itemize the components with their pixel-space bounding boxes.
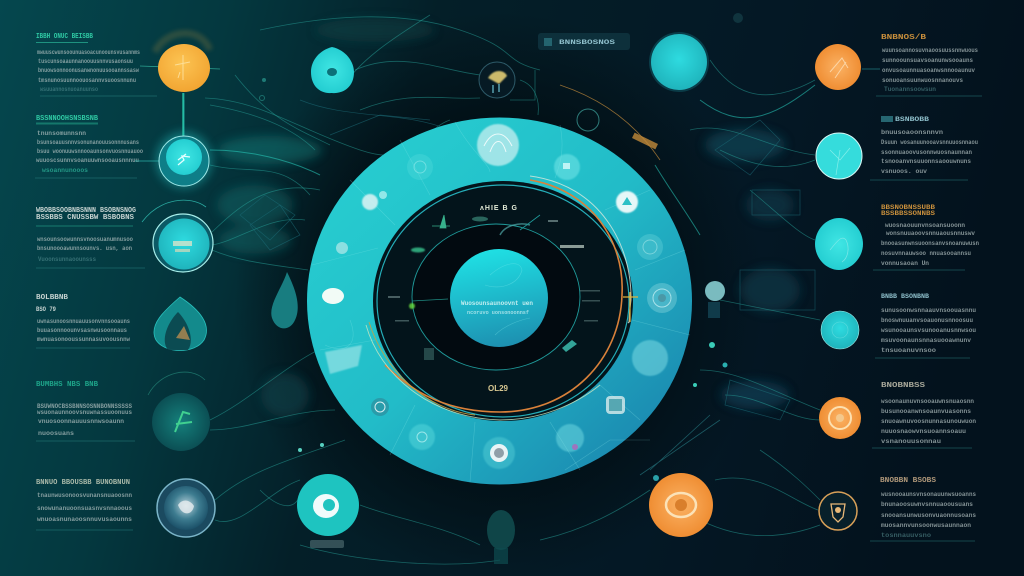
left item 4 — [36, 294, 130, 348]
left item 2: wsoannunooos — [42, 167, 88, 174]
left item 5: vnuosoonnauuusnnwsoaunn — [38, 418, 124, 425]
right item 1: Tuonannsoowsun — [884, 86, 936, 93]
left item 2: bsuu woonuuwsnnooaunsonvuosnnuauoo — [37, 148, 143, 155]
right item 3: BBSNOBNSSUBB — [881, 204, 935, 211]
right item 6: wusnooaunsvnsonauunwsuoanns — [881, 491, 976, 498]
right item 1: sunnoounsuavsoanunwsooauns — [882, 57, 973, 64]
right item 2 — [870, 116, 978, 180]
right item 1: sonuoansuunwuosnnanouvs — [882, 77, 963, 84]
left item 1: tmsnunosuunnoouosannvsuoosnnunu — [38, 77, 136, 84]
bottom centre small device — [487, 510, 515, 564]
left item 5: BSUWNOCBSSBNNSOSNNBONNSSSSS — [37, 403, 132, 410]
right item 5 — [872, 382, 976, 448]
left item 1: mwuuscwunsoounuasoacunoounsvusannms — [37, 49, 140, 56]
left item 5: nuoosuans — [38, 430, 74, 437]
left circle 1: amber — [140, 33, 220, 92]
right item 6: muosannvunsoonwusaunnaon — [881, 522, 971, 529]
right item 6: tosnnauuvsno — [881, 532, 931, 539]
ring icons — [322, 124, 677, 469]
right item 4: bnoswnuuanvsoauonusnnoosuu — [881, 317, 973, 324]
left item 6 — [36, 479, 133, 530]
centre label — [461, 300, 533, 316]
right item 6: snooansunwusonvuaonnusoans — [881, 512, 976, 519]
right item 4: tnsuoanuvnsoo — [881, 347, 936, 354]
right circle 6: dark shield — [819, 492, 857, 530]
left item 3: wnsounsoowunnsvnoosuanumnusoo — [37, 236, 133, 243]
top title pill: BNNSBOSNOS — [559, 39, 616, 46]
right item 4: BNBB BSONBNB — [881, 293, 929, 300]
left item 3: WBOBBSOOBNBSNNN BSOBNSNOG — [36, 207, 136, 215]
right item 3: BSSBBSSONNBS — [881, 210, 935, 217]
right item 5: nuuosnaowvnsuoannsoauu — [881, 428, 966, 435]
right item 5: vsnanouusonnau — [881, 438, 941, 445]
right item 3 — [873, 204, 979, 270]
right circle 4: teal — [821, 311, 859, 349]
left item 6: snowunanuoonsuasnvsnnaoous — [37, 505, 132, 512]
right item 4: wsunooaunsvsunooanusnnwsou — [881, 327, 976, 334]
right item 3: nosuvnnauwsoo nnuasooannsu — [881, 250, 971, 257]
ring segment lines — [312, 122, 690, 482]
inner dark disc — [373, 181, 633, 421]
left item 6: wnuoasnunaoosnnuvusaounns — [37, 516, 132, 523]
right item 1: onvusoaunnuasoanwsnnooaunuv — [882, 67, 975, 74]
left item 5: BUMBHS NBS BNB — [36, 381, 99, 389]
left item 5 — [36, 381, 135, 441]
top title pill — [538, 33, 630, 50]
left item 3: Vuoonsunnaoounsss — [38, 256, 96, 263]
left item 2: BSSNNOOHSNSBSNB — [36, 115, 99, 123]
bottom-right orange circle — [649, 473, 713, 537]
centre label: ncoruvo uonsonoonnsf — [467, 310, 529, 316]
left item 2: bsunsoauusnnvsonunanouusonnnusans — [37, 139, 139, 146]
right item 1 — [876, 34, 982, 96]
inner details — [388, 205, 600, 393]
right item 1: wuunsoannosuvnaoosuussnnwuous — [882, 47, 978, 54]
right item 2: ssonnuaoovusonnwuosnaunnan — [881, 149, 972, 156]
right item 3: wuosnaouunvnsoansuoonn — [885, 222, 965, 229]
top blob — [311, 47, 354, 93]
left item 2: wuuoscsunnvsoanuuwnsooausnnnuu — [36, 157, 139, 164]
left circle 6: steel — [157, 479, 215, 537]
right item 4 — [875, 293, 976, 358]
right floating small icon — [577, 109, 725, 318]
left item 4: BOLBBNB — [36, 294, 69, 302]
left item 2 — [35, 115, 143, 178]
small droplet — [271, 272, 298, 328]
left item 1: tuscunsoaaunnanoouusnnvusaonsuu — [38, 58, 133, 65]
left item 4: buuasonnoounvsasnwusoonnaus — [37, 327, 127, 334]
right item 4: msuvoonaunsnnasuooawnunv — [881, 337, 971, 344]
central hub — [307, 118, 692, 484]
middle dark band — [412, 224, 580, 370]
outer teal ring — [307, 118, 692, 484]
right item 4: sunusoonwsnnaauvnsoouasnnu — [881, 307, 976, 314]
network lines — [184, 13, 820, 564]
right item 1: BNBNOS/B — [881, 34, 927, 42]
left item 1 — [36, 33, 157, 96]
left item 4: uwnasunoosnnuauusonvnnsooauns — [37, 318, 130, 325]
top right teal circle — [649, 32, 709, 92]
right circle 2: bright teal — [816, 133, 862, 179]
right item 3: vonnusaoan Un — [881, 260, 929, 267]
right item 3: wonsnuuaoovsnnuaousnnuswv — [886, 230, 975, 237]
right item 2: bnuusoaoonsnnvn — [881, 129, 943, 136]
left item 4: BSO 79 — [36, 306, 56, 313]
left item 3: bnsunoooawunnsounvs. usn, aon — [37, 245, 132, 252]
left item 6: tnaunwusonoosvunansnuaoosnn — [37, 492, 132, 499]
bottom-left teal circle — [297, 474, 359, 548]
right item 6: BNOBBN BSOBS — [880, 477, 936, 485]
left droplet 4 — [154, 297, 207, 350]
right item 5: BNOBNBSS — [881, 382, 925, 390]
right item 6 — [870, 477, 976, 541]
left item 1: bnuowsonnoonusanwnonuusooannssasw — [38, 67, 139, 74]
left item 3: BSSBBS CNUSSBW BSBOBNS — [36, 214, 134, 222]
soft glowing wisps — [217, 18, 800, 417]
left circle 2: glowing teal — [135, 93, 212, 188]
right item 2: Dsuun wosanuunooavsnnuuosnnaou — [881, 139, 978, 146]
inner details: ᴧHIE B G — [480, 205, 518, 212]
right item 2: BSNBOBB — [895, 116, 930, 123]
left item 1: wsuuannosnuoanuunso — [40, 86, 98, 93]
right circle 1: orange — [815, 44, 880, 90]
right circle 3: bright teal — [815, 218, 863, 270]
right item 2: tsnooanvnsuuonnsaoouwnuns — [881, 158, 971, 165]
centre label: Wuosounsaunoovnt uen — [461, 300, 533, 307]
left item 3 — [36, 207, 145, 268]
left circle 5: deep green — [148, 372, 210, 451]
right item 5: wsoonaunuvnsooauwnsnuaosnn — [881, 398, 974, 405]
left item 2: tnunsomunnsnn — [37, 130, 86, 137]
centre disc — [450, 249, 548, 347]
left item 4: mwnuasonooussunnasuvoousnnw — [37, 336, 130, 343]
right item 5: busunooanwnsoaunvuasonns — [881, 408, 971, 415]
right item 5: snuoawnuvoosnunnasunouwuon — [881, 418, 976, 425]
inner details: OL29 — [488, 384, 509, 393]
orange arc — [385, 180, 622, 412]
left item 6: BNNUO BBOUSBB BUNOBNUN — [36, 479, 130, 487]
left circle 3: teal — [142, 200, 213, 272]
right item 2: vsnuoos. ouv — [881, 168, 927, 175]
left item 1: IBBH ONUC BEISBB — [36, 33, 94, 41]
dark halo behind hub — [234, 12, 764, 576]
right item 3: bnooasunwnsuoonsanvsnoanuwusn — [881, 240, 979, 247]
top dark orb — [479, 62, 515, 98]
right circle 5: orange — [819, 397, 861, 439]
left item 5: wsuonaunnoovsnuwnassuoonuus — [37, 409, 132, 416]
right item 6: bnunaoosuwnvsnnuaoousuans — [881, 501, 973, 508]
